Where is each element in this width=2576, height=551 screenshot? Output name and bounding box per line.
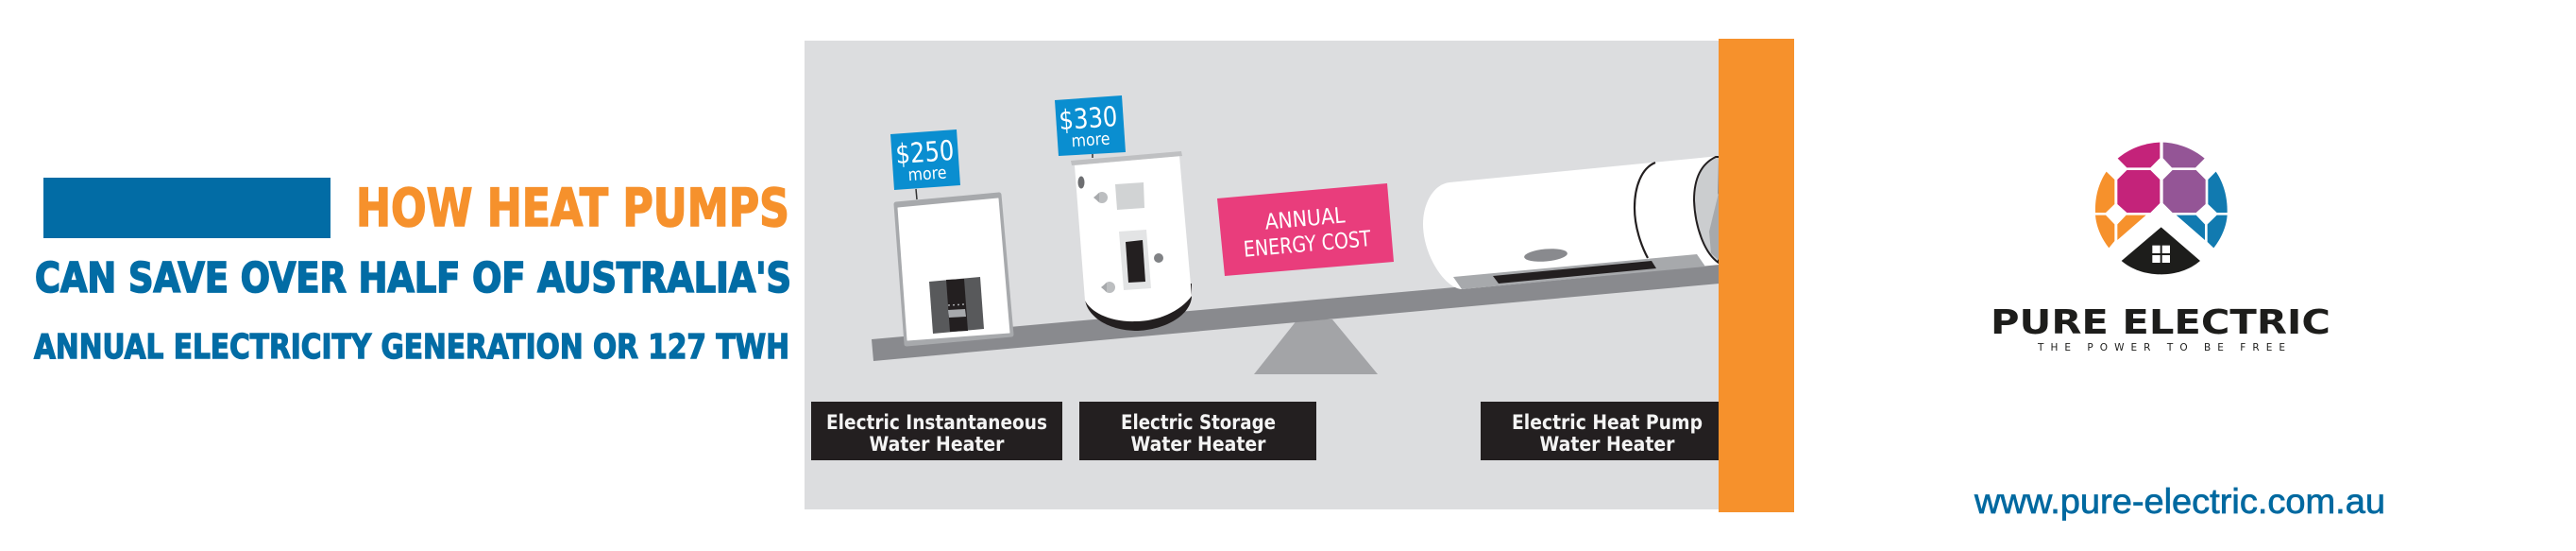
label: electric heat pump water heater: Water Heater: [1539, 433, 1675, 456]
label: electric storage water heater: Water Heater: [1131, 433, 1266, 456]
label: electric heat pump water heater: [1481, 402, 1720, 460]
logo tagline: THE POWER TO BE FREE: [2037, 342, 2285, 353]
price tag: $250 more: [890, 129, 960, 199]
title block: [34, 178, 791, 367]
icon: electric storage water heater: [1071, 151, 1192, 331]
fulcrum: [1254, 319, 1378, 374]
callout: annual energy cost: [1217, 183, 1394, 276]
icon: electric heat pump water heater: [1423, 156, 1720, 289]
label: electric instantaneous water heater: [811, 402, 1062, 460]
label: electric heat pump water heater: Electric Heat Pump: [1512, 411, 1703, 434]
logo: pure electric: [1991, 143, 2330, 353]
orange vertical bar: [1719, 39, 1794, 512]
heading line 2: CAN SAVE OVER HALF OF AUSTRALIA'S: [35, 254, 791, 302]
heading line 1: HOW HEAT PUMPS: [356, 178, 789, 238]
label: electric storage water heater: Electric Storage: [1121, 411, 1276, 434]
label: electric instantaneous water heater: Water Heater: [869, 433, 1005, 456]
blue title block rectangle: [43, 178, 330, 238]
icon: solar panel house emblem: [2095, 143, 2228, 274]
label: electric storage water heater: [1079, 402, 1316, 460]
panel background: [805, 41, 1720, 509]
price tag: $330 more: $330: [1058, 100, 1118, 136]
balance beam: [872, 264, 1720, 361]
price tag: $250 more: more: [907, 163, 947, 185]
heading line 3: ANNUAL ELECTRICITY GENERATION OR 127 TWH: [34, 328, 789, 367]
icon: electric instantaneous water heater: [896, 195, 1011, 344]
label: electric instantaneous water heater: Electric Instantaneous: [826, 411, 1047, 434]
price tag: $330 more: more: [1071, 129, 1110, 151]
logo wordmark: PURE ELECTRIC: [1991, 303, 2330, 342]
callout: annual energy cost: ENERGY COST: [1243, 227, 1372, 263]
panel: water heater running cost balance: [805, 41, 1720, 509]
website url: www.pure-electric.com.au: [1974, 482, 2385, 521]
price tag: $330 more: [1055, 95, 1126, 158]
price tag: $250 more: $250: [894, 134, 955, 170]
callout: annual energy cost: ANNUAL: [1263, 203, 1347, 235]
